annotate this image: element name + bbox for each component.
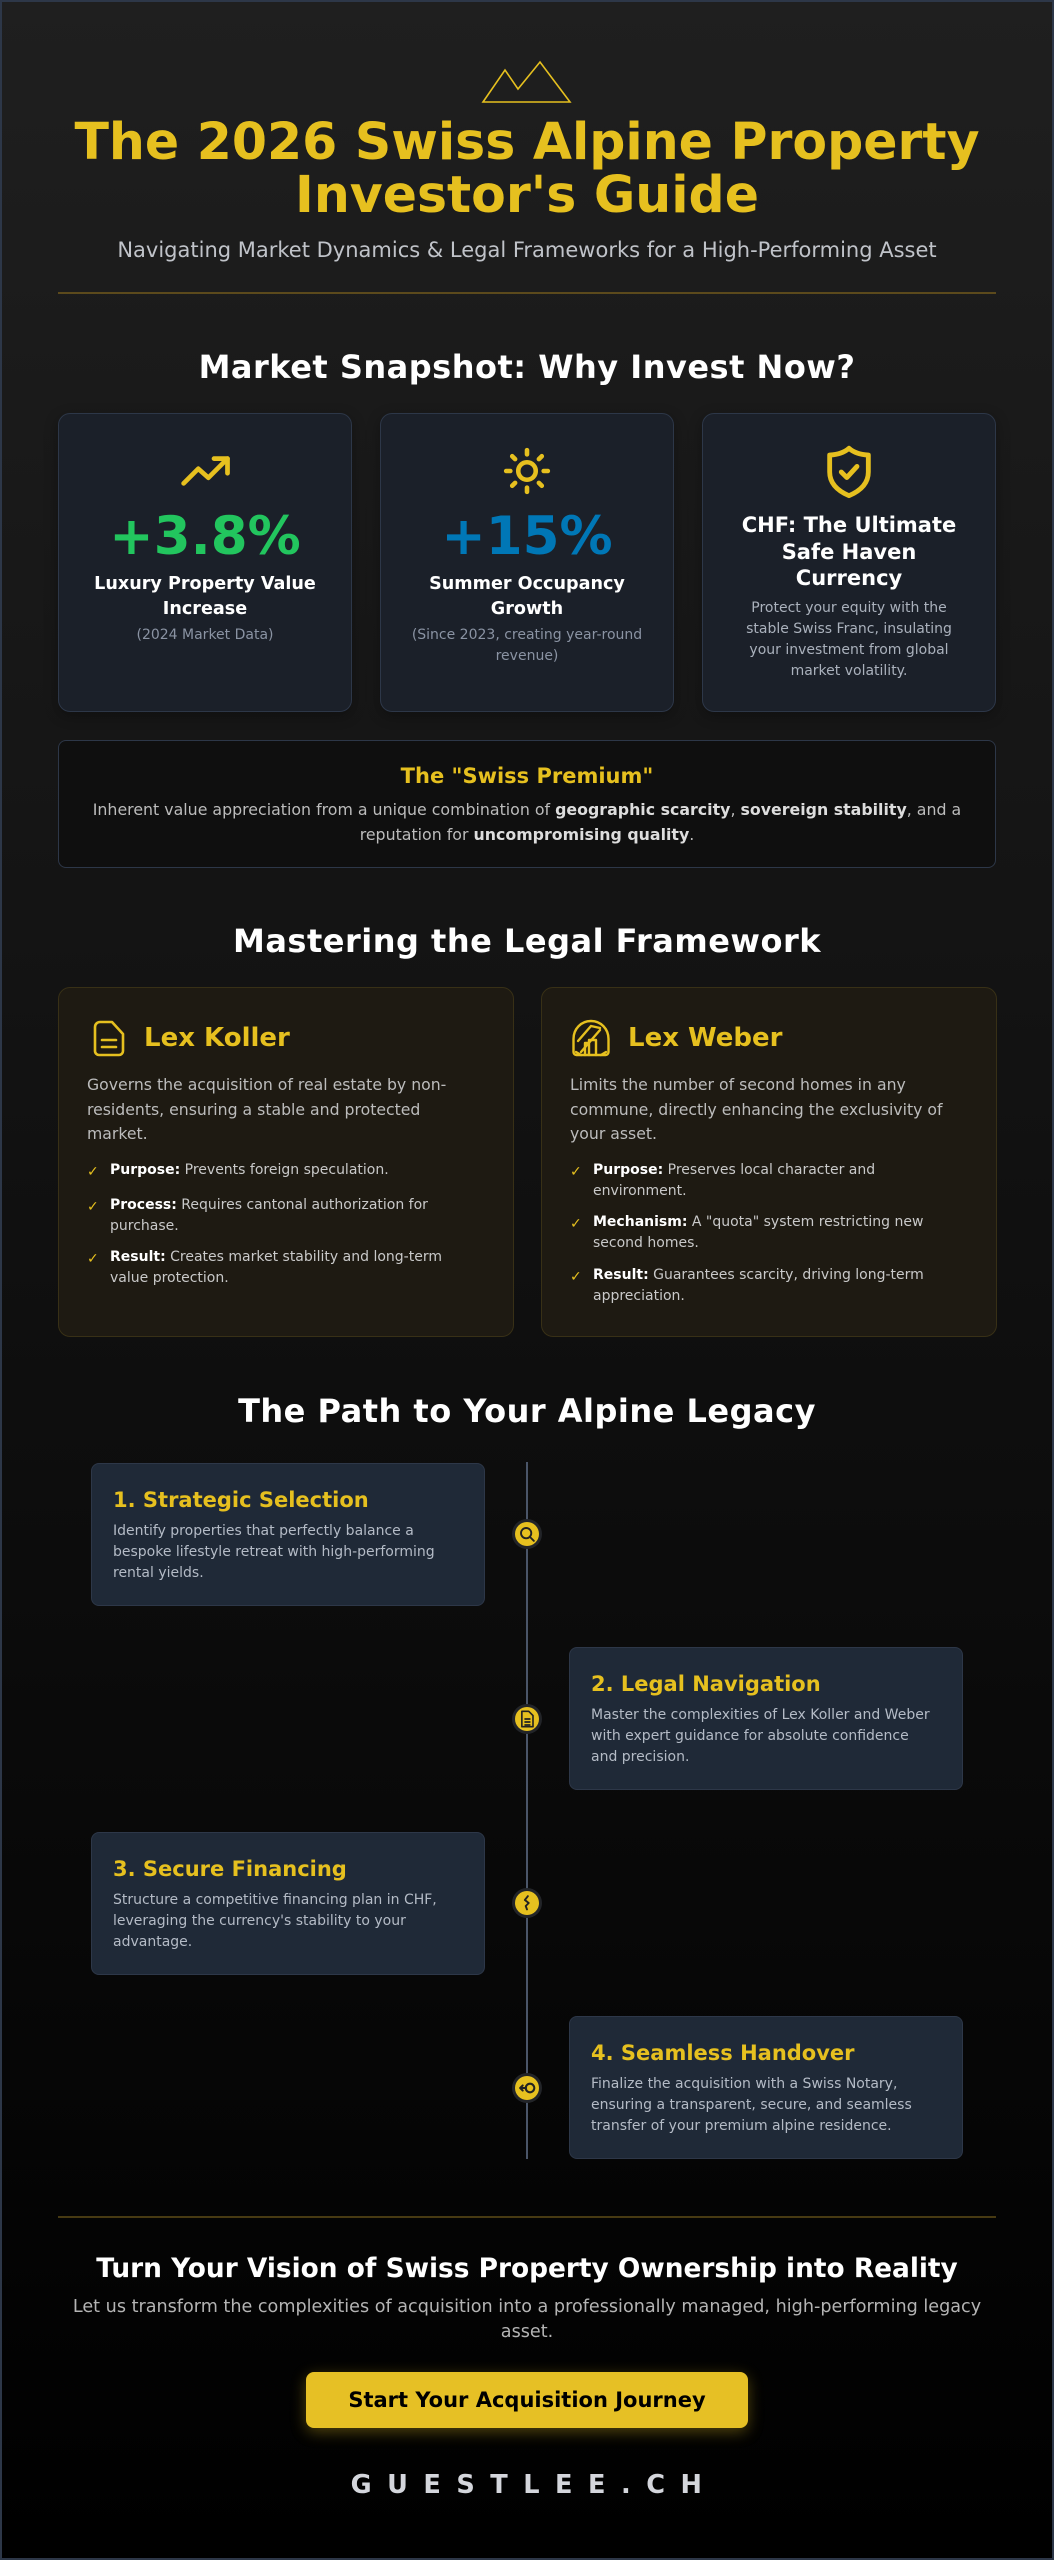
card heading: Lex Weber — [628, 1023, 782, 1053]
icon: step 4 key node — [515, 2076, 539, 2100]
item: result: ✓ — [570, 1269, 582, 1285]
icon: step 1 search node — [515, 1522, 539, 1546]
timeline line — [526, 1462, 528, 2159]
card description: residents, ensuring a stable and protected — [87, 1100, 420, 1118]
panel: occupancy stat — [380, 413, 674, 712]
step title: 4. Seamless Handover — [591, 2041, 855, 2065]
card description — [570, 1075, 943, 1143]
item: result: ✓ — [87, 1251, 99, 1267]
icon: trending up — [181, 456, 230, 486]
title — [74, 112, 980, 224]
panel text: reputation for uncompromising quality. — [360, 825, 694, 844]
stat note: (2024 Market Data) — [136, 627, 274, 643]
CTA heading: Turn Your Vision of Swiss Property Ownership into Reality — [96, 2253, 958, 2284]
item: result: Result: Guarantees scarcity, driving long-term — [593, 1267, 924, 1283]
stat label: Growth — [491, 599, 563, 619]
icon: shield check — [827, 446, 871, 498]
stat note — [412, 627, 642, 664]
step 1 card — [91, 1463, 485, 1606]
step title: 1. Strategic Selection — [113, 1488, 369, 1512]
item: result: Result: Creates market stability and long-term — [110, 1249, 442, 1265]
title: The 2026 Swiss Alpine Property — [74, 112, 980, 171]
item: result: value protection. — [110, 1270, 229, 1286]
panel: Lex Weber — [541, 987, 997, 1337]
heading: market snapshot: Market Snapshot: Why Invest Now? — [199, 348, 855, 386]
step text: advantage. — [113, 1934, 192, 1950]
item: purpose: ✓ — [87, 1164, 99, 1180]
stat label — [429, 574, 625, 619]
timeline — [526, 1462, 528, 2159]
heading: legal framework: Mastering the Legal Framework — [233, 922, 821, 960]
panel: Swiss Premium — [58, 740, 996, 868]
card description: commune, directly enhancing the exclusivity of — [570, 1100, 942, 1118]
step 3 card — [91, 1832, 485, 1975]
card body — [746, 600, 952, 679]
item: result — [570, 1267, 924, 1304]
panel heading: The "Swiss Premium" — [401, 764, 653, 788]
icon: step 3 finance node — [515, 1891, 539, 1915]
step text: rental yields. — [113, 1565, 204, 1581]
checklist — [87, 1162, 442, 1286]
item: purpose: Purpose: Preserves local character and — [593, 1162, 875, 1178]
step 2 card — [569, 1647, 963, 1790]
card description: market. — [87, 1124, 148, 1143]
card body: market volatility. — [791, 663, 907, 679]
heading: path to legacy: The Path to Your Alpine Legacy — [238, 1392, 816, 1430]
panel: Lex Koller — [58, 987, 514, 1337]
icon: document — [94, 1020, 124, 1056]
panel: CHF safe haven — [702, 413, 996, 712]
stat label — [94, 574, 316, 619]
card title — [742, 513, 956, 590]
panel text: Inherent value appreciation from a unique combination of geographic scarcity, sovereign stability, and a — [93, 800, 961, 819]
step text: and precision. — [591, 1749, 689, 1765]
icon: step 2 document node — [515, 1707, 539, 1731]
stat label: Summer Occupancy — [429, 574, 625, 594]
icon: sun — [504, 448, 550, 494]
item: process: Process: Requires cantonal authorization for — [110, 1197, 428, 1213]
title: Investor's Guide — [295, 164, 759, 224]
item: purpose: Purpose: Prevents foreign speculation. — [110, 1162, 389, 1178]
panel: property value stat — [58, 413, 352, 712]
step text: Finalize the acquisition with a Swiss Notary, — [591, 2076, 897, 2092]
CTA text: asset. — [501, 2322, 553, 2342]
icon: mountain logo — [482, 60, 572, 103]
step text: ensuring a transparent, secure, and seamless — [591, 2097, 912, 2113]
step text: Identify properties that perfectly balance a — [113, 1523, 414, 1539]
CTA text — [73, 2297, 981, 2342]
item: mechanism: Mechanism: A "quota" system restricting new — [593, 1214, 923, 1230]
item: mechanism — [570, 1214, 923, 1251]
CTA button: Start Your Acquisition Journey — [348, 2388, 706, 2412]
item: result — [87, 1249, 442, 1286]
card description: your asset. — [570, 1124, 657, 1143]
card body: your investment from global — [749, 642, 949, 658]
item: mechanism: second homes. — [593, 1235, 699, 1251]
item: result: appreciation. — [593, 1288, 685, 1304]
icon: protected home — [572, 1020, 610, 1056]
card heading: Lex Koller — [144, 1023, 290, 1053]
stat note: revenue) — [496, 648, 558, 664]
step text — [113, 1892, 437, 1950]
step 4 card — [569, 2016, 963, 2159]
stat label: Increase — [163, 599, 247, 619]
item: process: purchase. — [110, 1218, 179, 1234]
card description: Governs the acquisition of real estate by non- — [87, 1075, 446, 1094]
item: purpose: ✓ — [570, 1164, 582, 1180]
stat value: +3.8% — [109, 506, 301, 567]
card title: CHF: The Ultimate — [742, 513, 956, 537]
item: mechanism: ✓ — [570, 1216, 582, 1232]
item: process — [87, 1197, 428, 1234]
panel text — [93, 800, 961, 844]
step title: 2. Legal Navigation — [591, 1672, 821, 1696]
card description — [87, 1075, 446, 1143]
card title: Safe Haven — [782, 540, 916, 564]
step text: bespoke lifestyle retreat with high-performing — [113, 1544, 435, 1560]
brand: GUESTLEE.CH — [351, 2470, 717, 2500]
stat label: Luxury Property Value — [94, 574, 316, 594]
card description: Limits the number of second homes in any — [570, 1075, 906, 1094]
step text — [591, 2076, 912, 2134]
stat note: (Since 2023, creating year-round — [412, 627, 642, 643]
step text — [113, 1523, 435, 1581]
CTA text: Let us transform the complexities of acquisition into a professionally managed, high-performing legacy — [73, 2297, 981, 2317]
CTA button — [306, 2372, 748, 2428]
card title: Currency — [796, 566, 902, 590]
item: process: ✓ — [87, 1199, 99, 1215]
step title: 3. Secure Financing — [113, 1857, 347, 1881]
item: purpose: environment. — [593, 1183, 687, 1199]
step text: leveraging the currency's stability to your — [113, 1913, 406, 1929]
subtitle: Navigating Market Dynamics & Legal Frameworks for a High-Performing Asset — [117, 238, 937, 262]
step text: transfer of your premium alpine residence. — [591, 2118, 892, 2134]
step text: with expert guidance for absolute confidence — [591, 1728, 909, 1744]
step text — [591, 1707, 930, 1765]
checklist — [570, 1162, 924, 1304]
stat value: +15% — [441, 506, 613, 567]
card body: Protect your equity with the — [751, 600, 947, 616]
item: purpose — [570, 1162, 875, 1199]
step text: Structure a competitive financing plan in CHF, — [113, 1892, 437, 1908]
card body: stable Swiss Franc, insulating — [746, 621, 952, 637]
step text: Master the complexities of Lex Koller and Weber — [591, 1707, 930, 1723]
